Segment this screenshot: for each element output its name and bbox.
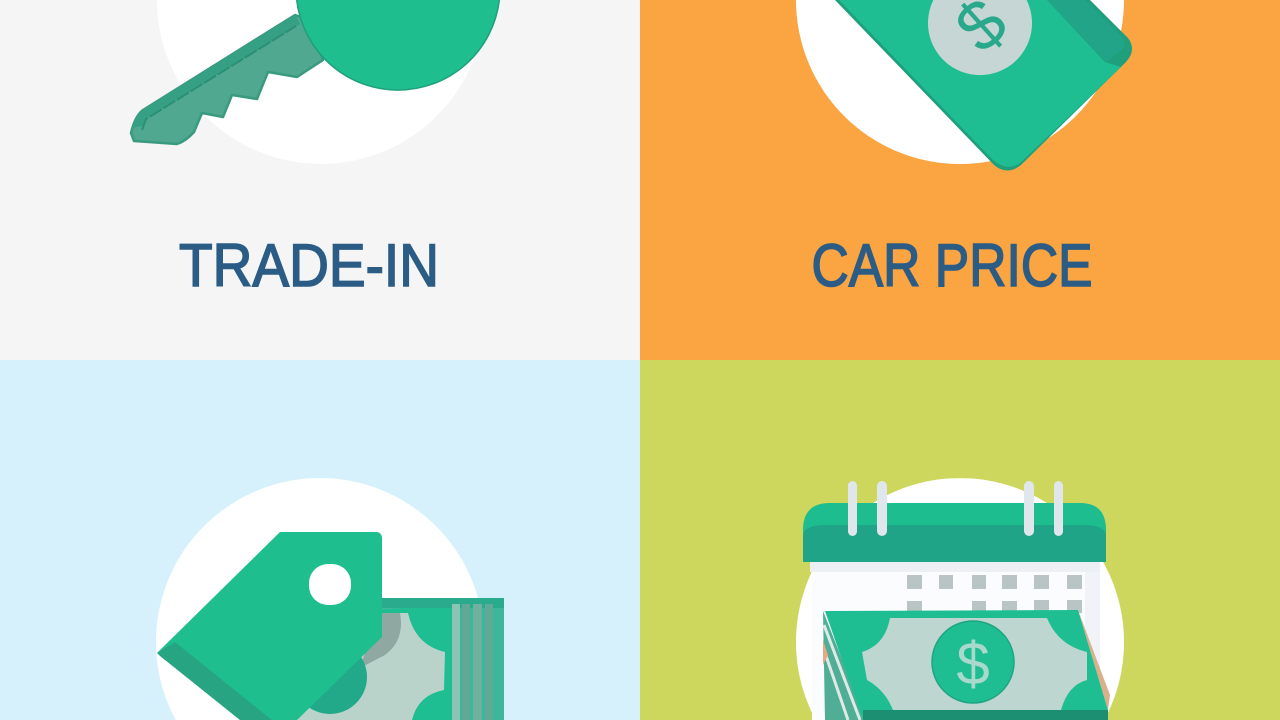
panel: calendar payments <box>640 360 1280 720</box>
icon: white circle behind banknote <box>796 0 1124 164</box>
heading: car price: CAR PRICE <box>812 232 1092 299</box>
icon: dollar coin: $ <box>956 630 990 697</box>
icon: dollar coin <box>928 0 1032 75</box>
heading: trade-in: TRADE-IN <box>179 232 439 299</box>
icon: banknote stack <box>293 598 504 720</box>
icon: calendar <box>803 481 1106 720</box>
icon: banknote <box>835 0 1132 170</box>
panel: car price <box>640 0 1280 360</box>
icon: key <box>131 0 499 144</box>
icon: white circle behind key <box>157 0 485 164</box>
icon: dollar coin <box>932 621 1014 703</box>
panel: trade-in <box>0 0 640 360</box>
icon: white circle behind calendar <box>796 478 1124 720</box>
panel: price tag <box>0 360 640 720</box>
icon: banknote stack <box>823 610 1110 720</box>
icon: white circle behind tag <box>156 478 484 720</box>
icon: price tag <box>157 532 382 720</box>
icon: tag hole <box>309 564 351 605</box>
